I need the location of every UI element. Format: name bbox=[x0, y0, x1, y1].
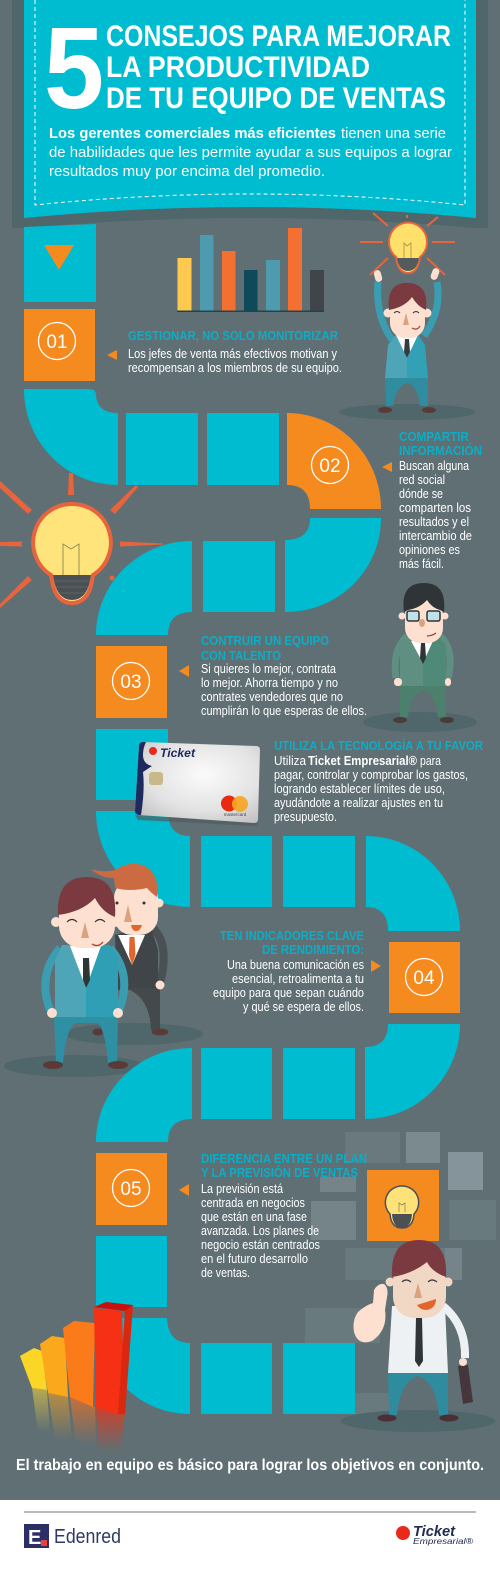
tip 5 text: en el futuro desarrollo bbox=[201, 1252, 308, 1266]
character: man with glasses bbox=[363, 583, 477, 732]
footer divider bbox=[24, 1511, 476, 1513]
step 01 badge: 01 bbox=[46, 332, 68, 353]
tip 2 text bbox=[382, 429, 482, 571]
title: DE TU EQUIPO DE VENTAS bbox=[106, 82, 446, 115]
title: 5 bbox=[44, 3, 104, 133]
tip 5 text: avanzada. Los planes de bbox=[201, 1224, 319, 1238]
character: man in teal suit (front) bbox=[4, 877, 144, 1077]
tip 3 text: CONTRUIR UN EQUIPO bbox=[201, 633, 329, 648]
board path: teal segments bbox=[24, 224, 460, 1414]
tip 2 text: COMPARTIR bbox=[399, 429, 470, 444]
icon: large light bulb bbox=[0, 473, 163, 608]
board path: teal curve above the shadow bbox=[96, 1048, 192, 1142]
step 02 badge bbox=[287, 413, 381, 509]
Ticket Empresarial logo: Empresarial® bbox=[413, 1536, 474, 1546]
title bbox=[44, 3, 451, 133]
tip 3 text bbox=[179, 633, 367, 718]
tip 1 text bbox=[107, 328, 342, 375]
step 05 badge: 05 bbox=[120, 1179, 142, 1200]
tip technology text bbox=[274, 738, 484, 824]
tip 5 text: centrada en negocios bbox=[201, 1196, 305, 1210]
tip technology text: ayudándote a realizar ajustes en tu bbox=[274, 796, 443, 810]
step 03 badge bbox=[96, 646, 167, 718]
tip technology text: presupuesto. bbox=[274, 810, 337, 824]
header banner bbox=[12, 0, 488, 228]
tip 1 text: GESTIONAR, NO SOLO MONITORIZAR bbox=[128, 328, 339, 343]
tip 3 text: lo mejor. Ahorra tiempo y no bbox=[201, 676, 338, 690]
character: man with thumb up and briefcase bbox=[341, 1240, 495, 1432]
step 04 badge bbox=[389, 942, 460, 1013]
tip 5 text: La previsión está bbox=[201, 1182, 283, 1196]
tip 2 text: Buscan alguna bbox=[399, 459, 469, 473]
tip 4 text: Una buena comunicación es bbox=[227, 958, 364, 972]
tip technology text: logrando establecer límites de uso, bbox=[274, 782, 445, 796]
intro text: Los gerentes comerciales más eficientes bbox=[49, 125, 336, 142]
background squares bbox=[305, 1132, 496, 1415]
tip technology text: pagar, controlar y comprobar los gastos, bbox=[274, 768, 468, 782]
character: man in dark suit (back) bbox=[65, 864, 203, 1045]
step 02 badge: 02 bbox=[319, 456, 341, 477]
Ticket card: Ticket bbox=[160, 746, 196, 760]
tip 3 text: contrates vendedores que no bbox=[201, 690, 343, 704]
tip 3 text: CON TALENTO bbox=[201, 648, 281, 663]
icon: bulb in orange square bbox=[367, 1170, 439, 1241]
step 04 badge: 04 bbox=[413, 968, 435, 989]
tip 5 text: Y LA PREVISIÓN DE VENTAS bbox=[201, 1165, 358, 1180]
Edenred logo bbox=[24, 1524, 121, 1549]
tip 4 text: DE RENDIMIENTO: bbox=[262, 942, 364, 957]
tip 2 text: más fácil. bbox=[399, 557, 444, 571]
tip 1 text: Los jefes de venta más efectivos motivan y bbox=[128, 347, 338, 361]
tip 5 text: negocio están centrados bbox=[201, 1238, 320, 1252]
step 03 badge: 03 bbox=[120, 672, 142, 693]
start arrow bbox=[44, 245, 74, 270]
intro text: tienen una serie bbox=[341, 125, 446, 142]
Ticket Empresarial logo bbox=[396, 1524, 474, 1546]
step 01 badge bbox=[24, 309, 95, 381]
tip 1 text: recompensan a los miembros de su equipo. bbox=[128, 361, 342, 375]
title: LA PRODUCTIVIDAD bbox=[106, 51, 370, 84]
tip 4 text: y qué se espera de ellos. bbox=[243, 1000, 364, 1014]
character: man with raised arms bbox=[339, 267, 475, 420]
tip 5 text: DIFERENCIA ENTRE UN PLAN bbox=[201, 1151, 367, 1166]
tip 5 text: de ventas. bbox=[201, 1266, 250, 1280]
tip 5 text bbox=[179, 1151, 367, 1280]
Edenred logo: Edenred bbox=[54, 1526, 121, 1548]
icon: small light bulb over man 1 bbox=[360, 213, 455, 275]
step 05 badge bbox=[96, 1153, 167, 1225]
tip 3 text: cumplirán lo que esperas de ellos. bbox=[201, 704, 367, 718]
tip 2 text: INFORMACIÓN bbox=[399, 443, 482, 458]
tip 2 text: dónde se bbox=[399, 487, 443, 501]
tip 4 text: TEN INDICADORES CLAVE bbox=[220, 928, 364, 943]
tip technology text: Utiliza bbox=[274, 754, 306, 768]
tip 4 text: equipo para que sepan cuándo bbox=[213, 986, 364, 1000]
Ticket card bbox=[135, 742, 260, 826]
Ticket Empresarial logo: Ticket bbox=[413, 1524, 456, 1540]
3D bar chart bbox=[20, 1302, 133, 1452]
tip 3 text: Si quieres lo mejor, contrata bbox=[201, 662, 336, 676]
tip technology text: Ticket Empresarial® bbox=[308, 754, 418, 768]
tip 2 text: opiniones es bbox=[399, 543, 460, 557]
Ticket card: mastercard bbox=[224, 812, 247, 817]
tip 2 text: red social bbox=[399, 473, 445, 487]
intro text: de habilidades que les permite ayudar a sus equipos a lograr bbox=[49, 144, 452, 161]
tip 2 text: intercambio de bbox=[399, 529, 472, 543]
bar chart bbox=[177, 228, 324, 312]
tip 4 text: esencial, retroalimenta a tu bbox=[232, 972, 364, 986]
intro text bbox=[49, 125, 452, 180]
tip technology text: para bbox=[420, 754, 441, 768]
tip 2 text: comparten los bbox=[399, 501, 471, 515]
tip 2 text: resultados y el bbox=[399, 515, 469, 529]
footer background bbox=[0, 1500, 500, 1572]
tip 5 text: que están en una fase bbox=[201, 1210, 307, 1224]
tip 4 text bbox=[213, 928, 381, 1014]
intro text: resultados muy por encima del promedio. bbox=[49, 163, 325, 180]
Edenred logo: E bbox=[28, 1527, 41, 1549]
